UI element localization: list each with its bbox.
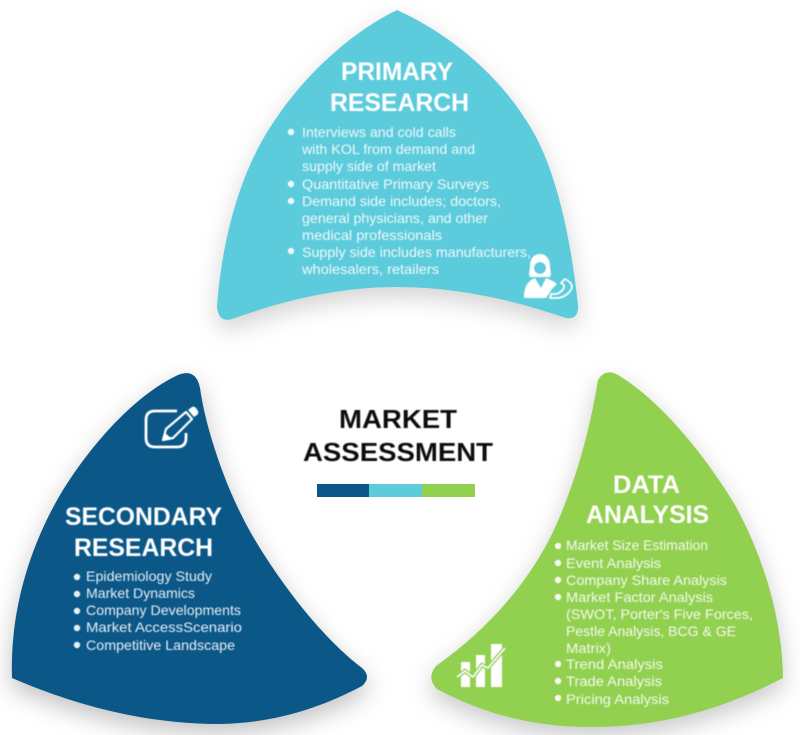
list: primary research bullets (288, 124, 531, 277)
heading: data analysis (586, 471, 709, 529)
list: data analysis bullets: Trend Analysis (566, 656, 663, 672)
list: data analysis bullets: Event Analysis (566, 555, 661, 571)
heading: primary research: RESEARCH (330, 89, 469, 117)
icon: doctor with phone (524, 254, 572, 298)
list: secondary research bullets: Competitive Landscape (86, 637, 235, 653)
legend bar (317, 484, 475, 497)
heading: data analysis: ANALYSIS (586, 501, 709, 529)
heading: secondary research (65, 503, 222, 562)
panel: primary research (217, 10, 578, 329)
list: data analysis bullets: Market Size Estimation (566, 537, 708, 553)
title: market assessment: MARKET (339, 404, 457, 434)
list: primary research bullets: Demand side includes; doctors, (302, 193, 501, 209)
icon: rising bar chart (457, 644, 505, 687)
list: primary research bullets: with KOL from demand and (301, 141, 475, 157)
list: primary research bullets: general physicians, and other (302, 210, 488, 226)
list: secondary research bullets (74, 568, 242, 653)
list: data analysis bullets: Pestle Analysis, BCG & GE (566, 623, 736, 639)
list: secondary research bullets: Epidemiology Study (86, 568, 212, 584)
list: data analysis bullets: Company Share Analysis (566, 572, 727, 588)
list: data analysis bullets: (SWOT, Porter's Five Forces, (566, 606, 753, 622)
icon: pencil and note (146, 407, 198, 447)
title: market assessment: ASSESSMENT (303, 437, 493, 467)
title: market assessment (303, 404, 493, 467)
list: primary research bullets: Interviews and cold calls (302, 124, 456, 140)
list: primary research bullets: supply side of market (302, 158, 436, 174)
heading: primary research: PRIMARY (341, 58, 453, 86)
list: data analysis bullets: Pricing Analysis (566, 691, 669, 707)
list: primary research bullets: Supply side includes manufacturers, (302, 244, 531, 260)
list: data analysis bullets: Market Factor Analysis (566, 589, 713, 605)
list: primary research bullets: medical professionals (302, 227, 442, 243)
list: data analysis bullets (555, 537, 753, 707)
panel: secondary research (12, 373, 367, 733)
list: secondary research bullets: Market AccessScenario (86, 619, 242, 635)
list: data analysis bullets: Matrix) (566, 640, 611, 656)
list: data analysis bullets: Trade Analysis (566, 673, 662, 689)
heading: secondary research: SECONDARY (65, 503, 222, 531)
list: secondary research bullets: Market Dynamics (86, 585, 195, 601)
heading: data analysis: DATA (613, 471, 680, 499)
list: secondary research bullets: Company Developments (86, 602, 241, 618)
list: primary research bullets: wholesalers, retailers (301, 261, 439, 277)
heading: primary research (330, 58, 469, 117)
panel: data analysis (431, 372, 783, 735)
heading: secondary research: RESEARCH (74, 534, 213, 562)
list: primary research bullets: Quantitative Primary Surveys (302, 176, 489, 192)
